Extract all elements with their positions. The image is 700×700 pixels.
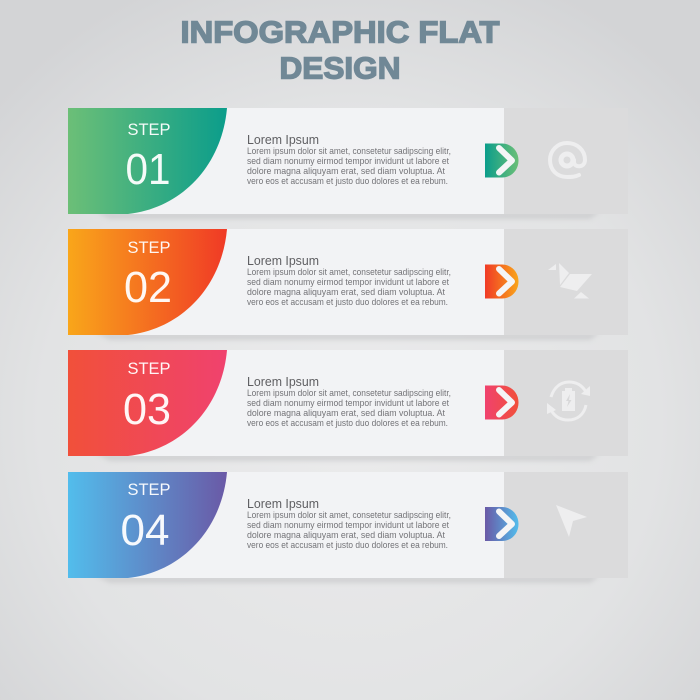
step 04 gradient badge xyxy=(68,472,227,578)
step 03 heading: Lorem Ipsum xyxy=(247,374,319,389)
step 02 body text xyxy=(247,267,451,307)
step 04 body text: vero eos et accusam et justo duo dolores et ea rebum. xyxy=(247,540,448,550)
icon: battery recycle xyxy=(547,382,590,420)
step 03 body text: dolore magna aliquyam erat, sed diam voluptua. At xyxy=(247,408,445,418)
step 02 gradient badge xyxy=(68,229,227,335)
step 02 arrow tab xyxy=(485,264,518,298)
step 04 body text: Lorem ipsum dolor sit amet, consetetur sadipscing elitr, xyxy=(247,510,451,520)
step 01 arrow tab xyxy=(485,144,518,178)
step 04 body text xyxy=(247,510,451,550)
step 03 body text: Lorem ipsum dolor sit amet, consetetur sadipscing elitr, xyxy=(247,388,451,398)
title xyxy=(180,14,500,86)
panel: step 02 xyxy=(68,229,628,340)
step 03 body text: sed diam nonumy eirmod tempor invidunt ut labore et xyxy=(247,398,449,408)
step 04 arrow tab xyxy=(485,507,518,541)
panel: step 03 xyxy=(68,350,628,461)
step 04 number: 04 xyxy=(120,506,170,555)
step 01 number: 01 xyxy=(126,145,170,194)
step 03 gradient badge xyxy=(68,350,227,456)
panel: step 04 xyxy=(68,472,628,583)
step 04 body text: dolore magna aliquyam erat, sed diam voluptua. At xyxy=(247,530,445,540)
step 02 label: STEP xyxy=(128,238,170,257)
step 01 gradient badge xyxy=(68,108,227,214)
step 03 arrow tab xyxy=(485,386,518,420)
step 01 body text: dolore magna aliquyam erat, sed diam voluptua. At xyxy=(247,166,445,176)
step 03 number: 03 xyxy=(123,385,171,434)
step 04 label: STEP xyxy=(128,480,170,499)
step 01 body text: Lorem ipsum dolor sit amet, consetetur sadipscing elitr, xyxy=(247,146,451,156)
step 01 heading: Lorem Ipsum xyxy=(247,132,319,147)
title: DESIGN xyxy=(280,50,400,86)
icon: at sign xyxy=(550,143,585,177)
step 01 body text xyxy=(247,146,451,186)
step 03 body text xyxy=(247,388,451,428)
title: INFOGRAPHIC FLAT xyxy=(180,14,500,50)
step 03 label: STEP xyxy=(128,359,170,378)
step 04 heading: Lorem Ipsum xyxy=(247,496,319,511)
step 02 heading: Lorem Ipsum xyxy=(247,253,319,268)
step 02 body text: sed diam nonumy eirmod tempor invidunt ut labore et xyxy=(247,277,449,287)
step 01 label: STEP xyxy=(128,120,170,139)
step 02 body text: dolore magna aliquyam erat, sed diam voluptua. At xyxy=(247,287,445,297)
step 02 body text: Lorem ipsum dolor sit amet, consetetur sadipscing elitr, xyxy=(247,267,451,277)
step 02 body text: vero eos et accusam et justo duo dolores et ea rebum. xyxy=(247,297,448,307)
step 01 body text: vero eos et accusam et justo duo dolores et ea rebum. xyxy=(247,176,448,186)
step 03 body text: vero eos et accusam et justo duo dolores et ea rebum. xyxy=(247,418,448,428)
icon: cursor arrow xyxy=(556,505,587,537)
step 02 number: 02 xyxy=(124,263,172,312)
icon: origami bird xyxy=(548,263,592,298)
step 01 body text: sed diam nonumy eirmod tempor invidunt ut labore et xyxy=(247,156,449,166)
panel: step 01 xyxy=(68,108,628,219)
step 04 body text: sed diam nonumy eirmod tempor invidunt ut labore et xyxy=(247,520,449,530)
